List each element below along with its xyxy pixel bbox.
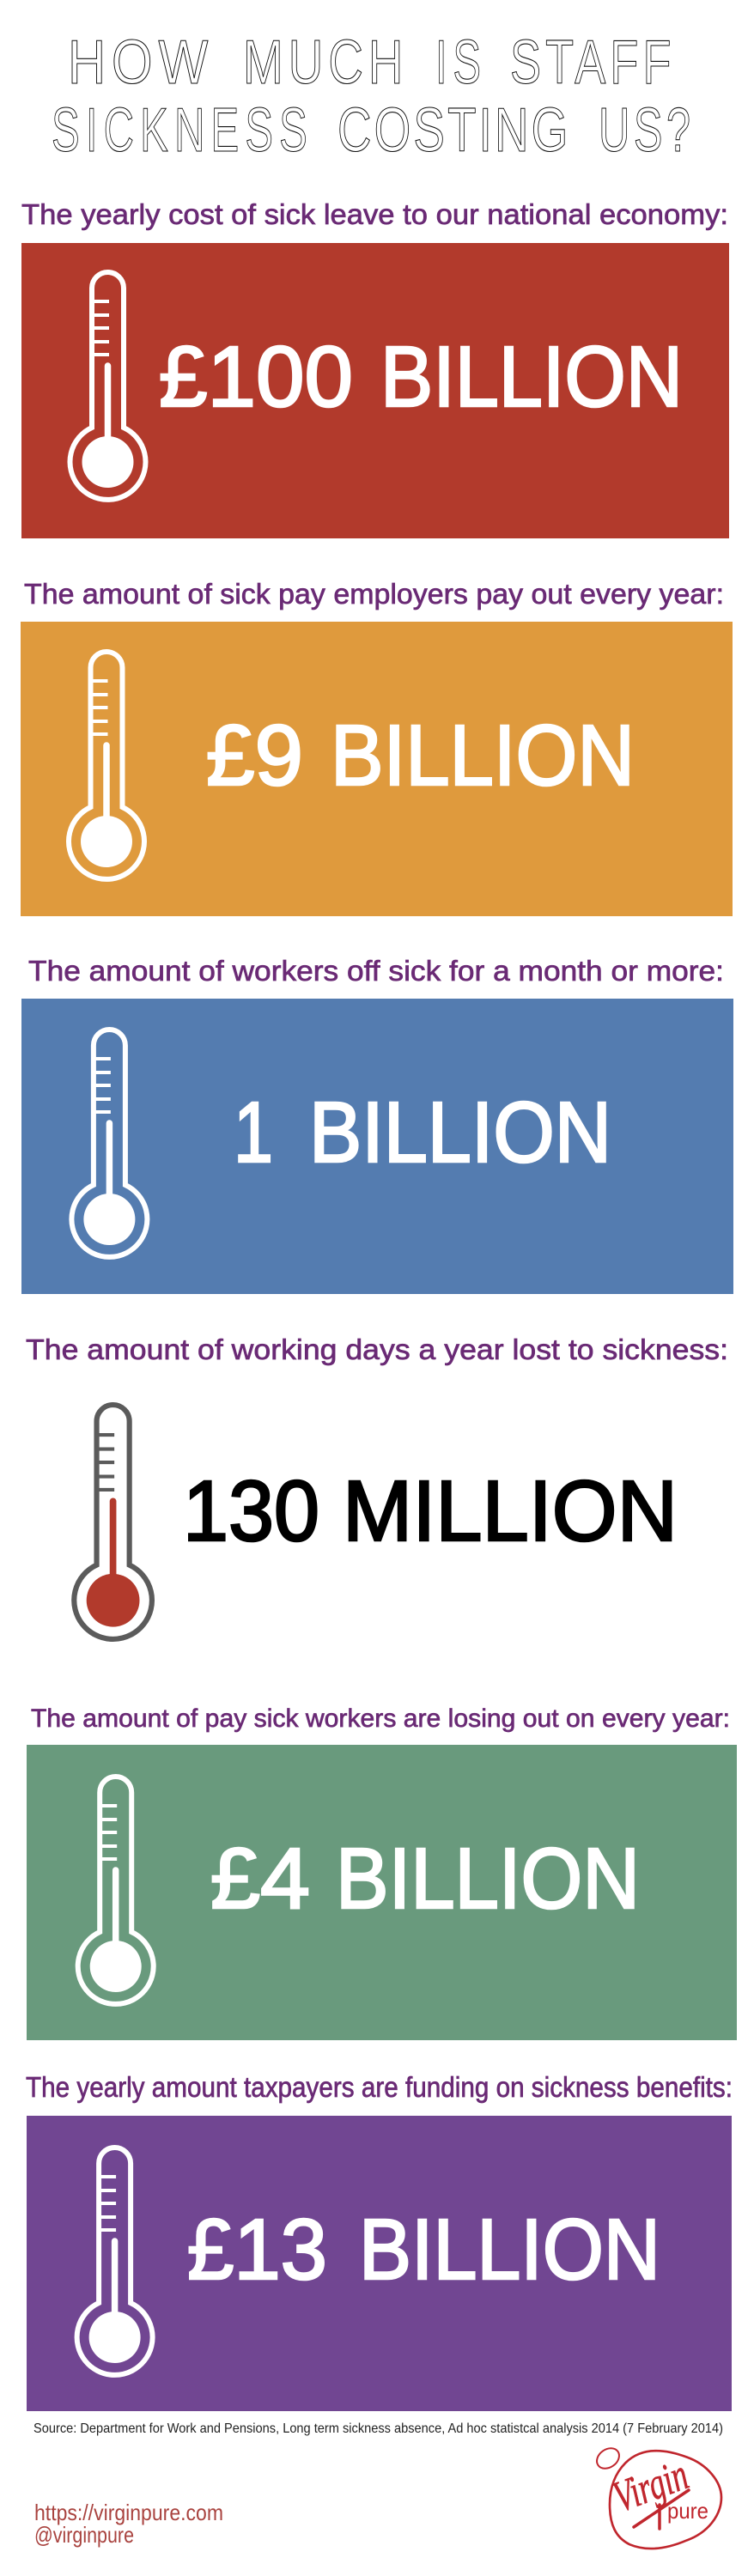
stat: £13 billion: BILLION [359, 2202, 660, 2298]
contact links: @virginpure [34, 2522, 134, 2548]
icon: thermometer [69, 652, 144, 879]
stat: £9 billion [206, 708, 635, 804]
heading: sick pay employers pay: The amount of sick pay employers pay out every year: [24, 578, 724, 610]
stat: £100 billion: £100 [159, 329, 353, 425]
title: IS [435, 28, 481, 97]
stat: £4 billion [210, 1831, 640, 1927]
title: STAFF [510, 28, 672, 97]
contact links: https://virginpure.com [34, 2500, 223, 2525]
panel: £4 billion [27, 1745, 737, 2040]
panel: 130 million [74, 1405, 678, 1639]
title: HOW [68, 28, 208, 97]
contact links [34, 2500, 223, 2548]
heading: workers off sick: The amount of workers off sick for a month or more: [28, 955, 724, 987]
icon: thermometer [78, 1777, 154, 2004]
stat: £100 billion: BILLION [380, 329, 683, 425]
stat: 1 billion: BILLION [309, 1084, 611, 1181]
panel: £13 billion [27, 2116, 732, 2411]
title [52, 27, 690, 165]
title: SICKNESS [52, 96, 307, 165]
panel: £100 billion [21, 243, 729, 538]
icon: thermometer [77, 2148, 153, 2375]
stat: £9 billion: BILLION [331, 708, 635, 804]
stat: 130 million: 130 [183, 1463, 319, 1559]
stat: £9 billion: £9 [206, 708, 303, 804]
title: US? [599, 96, 690, 165]
heading: yearly cost of sick leave: The yearly cost of sick leave to our national economy: [21, 198, 728, 230]
stat: 130 million [183, 1463, 678, 1559]
title: COSTING [337, 95, 568, 165]
stat: £4 billion: BILLION [336, 1831, 640, 1927]
logo: Virgin Pure: Virgin [607, 2451, 695, 2522]
stat: £100 billion [159, 329, 683, 425]
stat: £13 billion [187, 2202, 660, 2298]
title: MUCH [243, 27, 403, 97]
panel: £9 billion [21, 622, 733, 916]
stat: £13 billion: £13 [187, 2202, 327, 2298]
heading: working days lost: The amount of working days a year lost to sickness: [26, 1334, 728, 1365]
logo: Virgin Pure: pure [667, 2498, 708, 2524]
panel: 1 billion [21, 999, 733, 1294]
stat: £4 billion: £4 [210, 1831, 310, 1927]
heading: pay sick workers lose: The amount of pay sick workers are losing out on every year: [31, 1704, 730, 1733]
logo: Virgin Pure [593, 2444, 721, 2549]
icon: thermometer [70, 272, 146, 500]
icon: thermometer red [74, 1405, 152, 1639]
stat: 1 billion: 1 [234, 1084, 273, 1181]
icon: thermometer [71, 1030, 147, 1257]
stat: 130 million: MILLION [343, 1463, 678, 1559]
